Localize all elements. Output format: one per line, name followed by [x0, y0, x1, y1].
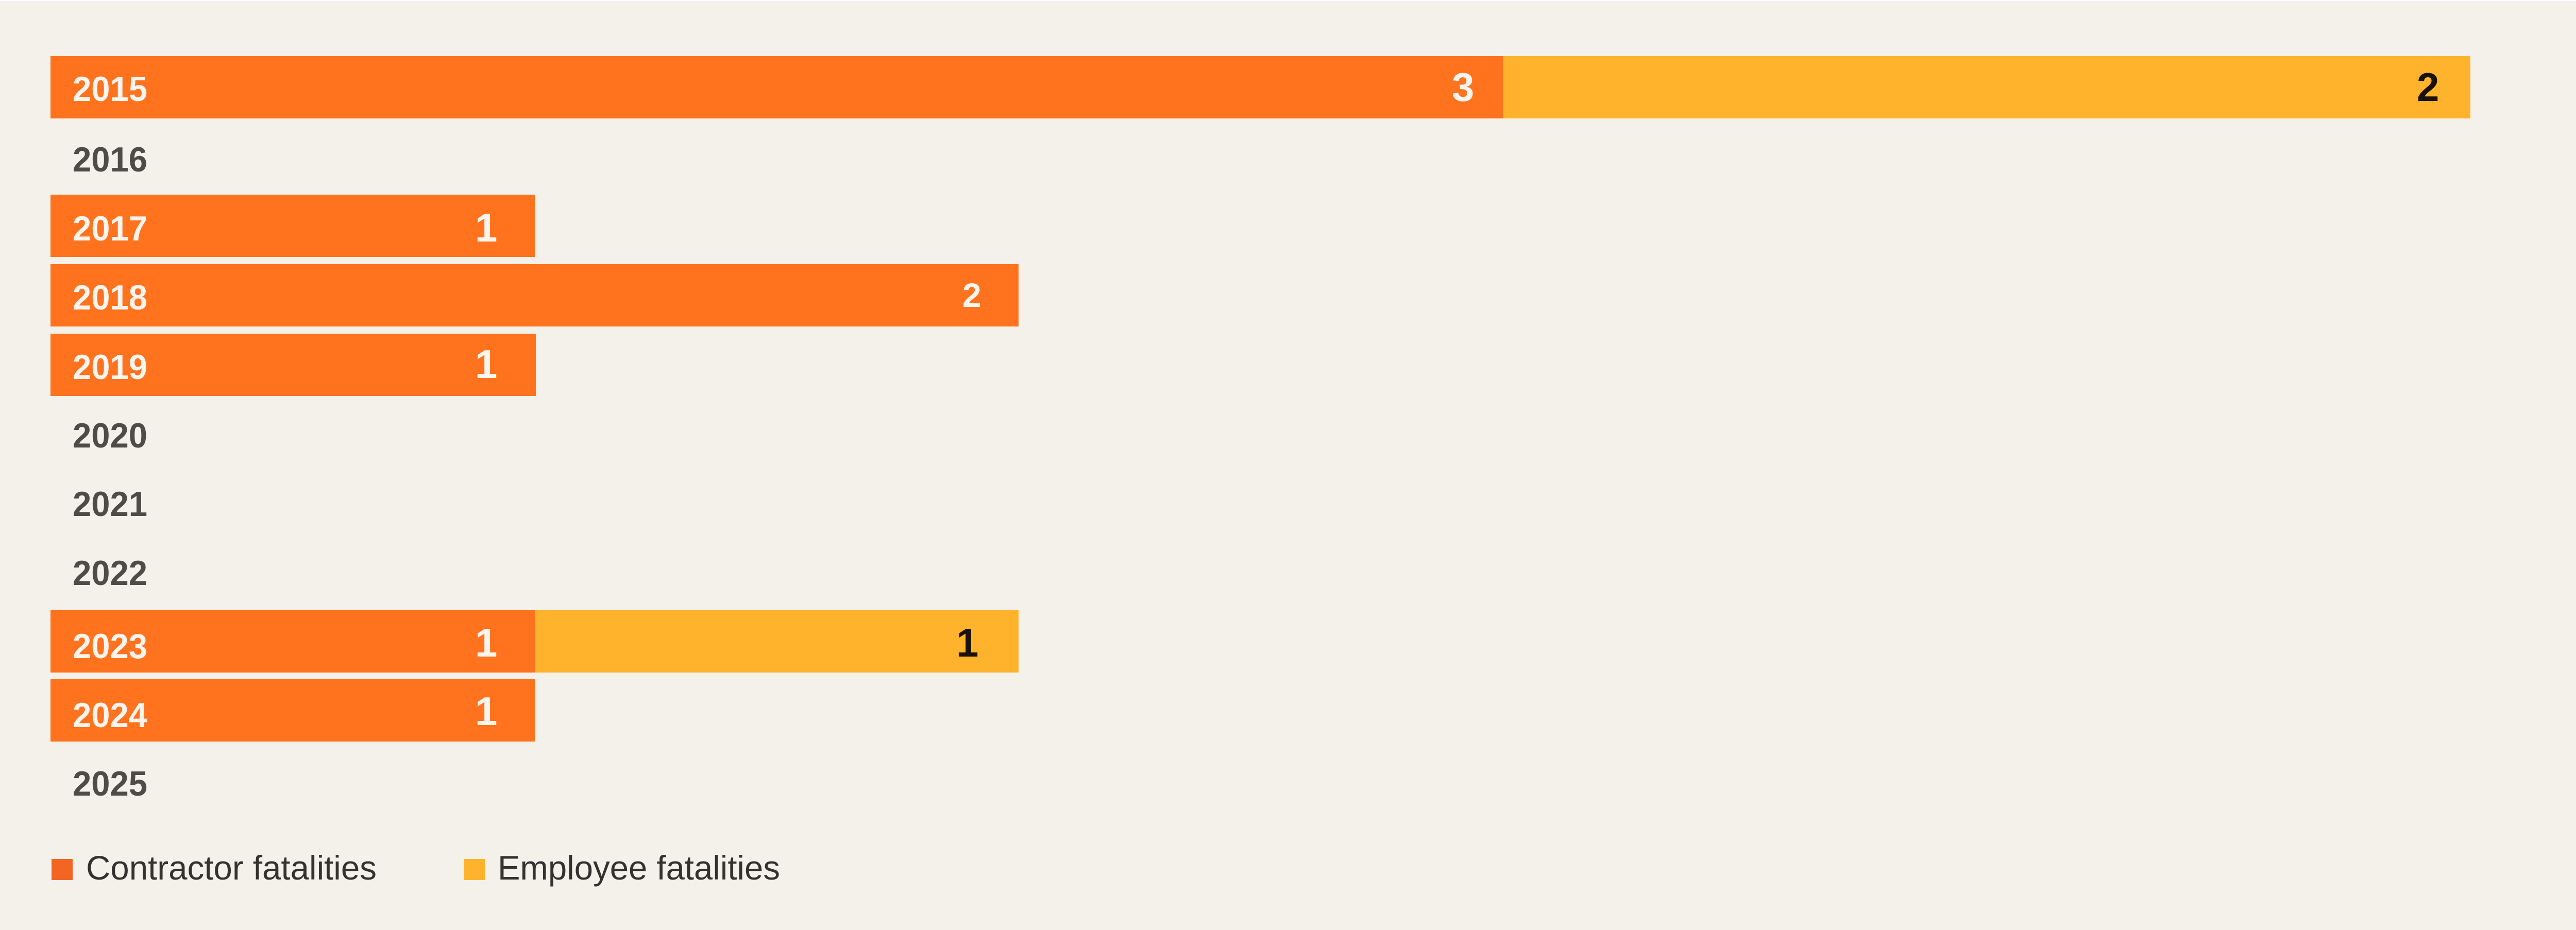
legend [52, 849, 780, 887]
legend item: contractor fatalities: Contractor fatalities [86, 849, 377, 887]
legend item: employee fatalities: Employee fatalities [498, 849, 780, 887]
row: 2023: 1 [956, 620, 978, 665]
row: 2024 [50, 679, 535, 742]
row: 2018 [50, 264, 1019, 326]
row: 2016: 2016 [73, 140, 147, 179]
row: 2019: 1 [475, 341, 497, 387]
row: 2017: 1 [475, 205, 497, 250]
row: 2017 [50, 195, 535, 257]
row: 2024: 1 [475, 688, 497, 734]
row: 2015 [50, 56, 2470, 118]
row: 2022: 2022 [73, 554, 147, 593]
row: 2024: 2024 [73, 696, 147, 735]
row: 2017: 2017 [73, 209, 147, 248]
row: 2019 [50, 334, 536, 396]
row: 2015: 2 [2417, 64, 2439, 110]
row: 2023: 2023 [73, 627, 147, 666]
row: 2023 [50, 610, 1019, 673]
row: 2020: 2020 [73, 416, 147, 455]
row: 2018: 2018 [73, 278, 147, 317]
row: 2015: 3 [1452, 64, 1474, 110]
row: 2019: 2019 [73, 348, 147, 387]
row: 2015: 2015 [73, 70, 147, 109]
row: 2018: 2 [962, 276, 981, 314]
row: 2023: 1 [475, 620, 497, 665]
row: 2025: 2025 [73, 764, 147, 803]
row: 2021: 2021 [73, 485, 147, 524]
